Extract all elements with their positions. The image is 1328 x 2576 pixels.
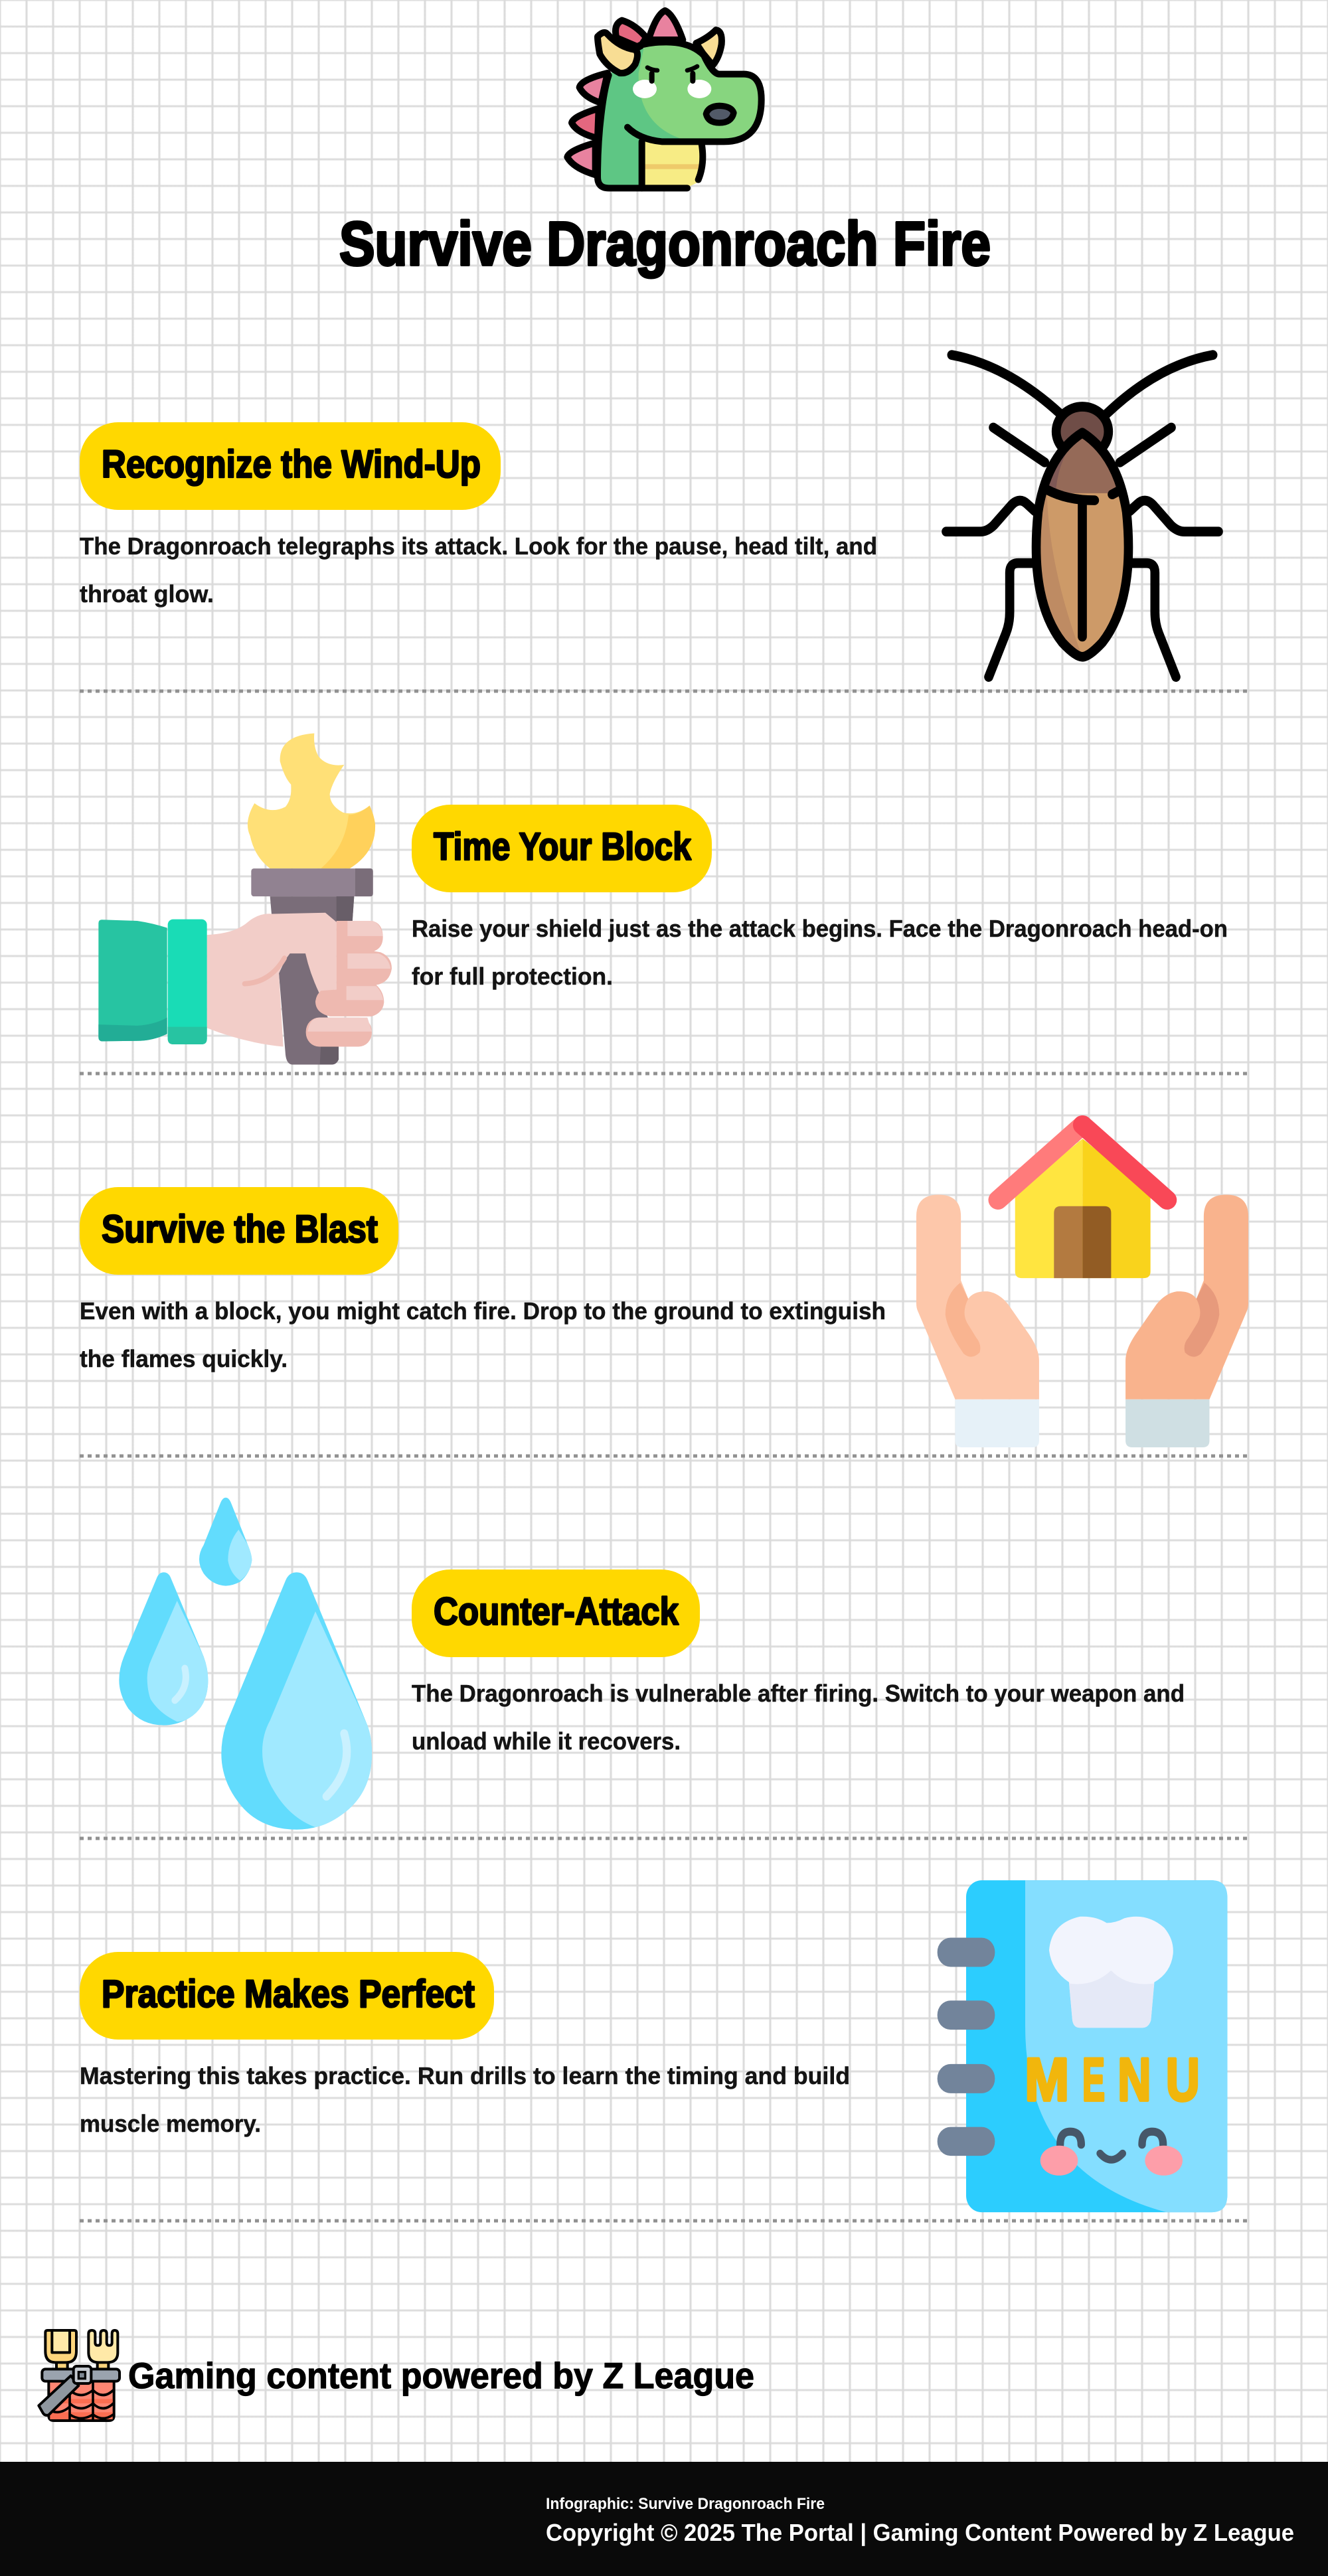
- body text: Mastering this takes practice. Run drills to learn the timing and build: [80, 2062, 850, 2089]
- icon: hands protecting house: [916, 1125, 1248, 1447]
- divider: [80, 1836, 1248, 1840]
- heading pill: [80, 1952, 494, 2040]
- divider: [80, 1072, 1248, 1076]
- body text: for full protection.: [412, 963, 613, 990]
- panel: practice makes perfect: [80, 1880, 1227, 2212]
- body text: [412, 1680, 1185, 1755]
- body text: [412, 915, 1228, 990]
- icon: cockroach: [946, 355, 1218, 677]
- icon: dragon head logo: [567, 11, 762, 188]
- body text: muscle memory.: [80, 2110, 261, 2137]
- body text: The Dragonroach telegraphs its attack. Look for the pause, head tilt, and: [80, 532, 877, 560]
- body text: throat glow.: [80, 580, 214, 607]
- icon: menu book: U: [1166, 2046, 1200, 2113]
- divider: [80, 689, 1248, 693]
- panel: time your block: [98, 734, 1228, 1065]
- icon: water drops: [119, 1498, 372, 1830]
- icon: picnic basket with utensils: [39, 2330, 120, 2421]
- body text: [80, 1297, 886, 1372]
- heading pill: [412, 1570, 700, 1657]
- sponsor text: Gaming content powered by Z League: [128, 2355, 754, 2396]
- icon: menu book: M: [1025, 2046, 1069, 2113]
- body text: The Dragonroach is vulnerable after firing. Switch to your weapon and: [412, 1680, 1185, 1707]
- heading pill: [412, 805, 712, 892]
- panel: survive the blast: [80, 1125, 1248, 1447]
- body text: unload while it recovers.: [412, 1728, 681, 1755]
- icon: menu book: [938, 1880, 1227, 2212]
- panel: counter-attack: [119, 1498, 1185, 1830]
- panel: recognize the wind-up: [80, 355, 1218, 677]
- heading pill: [80, 1187, 398, 1275]
- footer caption: Infographic: Survive Dragonroach Fire: [546, 2495, 825, 2513]
- heading pill: Recognize the Wind-Up: [102, 443, 481, 486]
- heading pill: Time Your Block: [434, 825, 692, 868]
- icon: menu book: N: [1118, 2046, 1151, 2113]
- heading pill: Counter-Attack: [434, 1590, 679, 1633]
- footer copyright: Copyright © 2025 The Portal | Gaming Content Powered by Z League: [546, 2519, 1294, 2547]
- title: Survive Dragonroach Fire: [339, 209, 991, 278]
- sponsor row: [39, 2330, 754, 2421]
- body text: [80, 532, 877, 607]
- divider: [80, 2219, 1248, 2223]
- icon: menu book: E: [1082, 2046, 1105, 2113]
- body text: [80, 2062, 850, 2137]
- body text: Even with a block, you might catch fire. Drop to the ground to extinguish: [80, 1297, 886, 1325]
- divider: [80, 1454, 1248, 1458]
- body text: the flames quickly.: [80, 1345, 288, 1372]
- body text: Raise your shield just as the attack begins. Face the Dragonroach head-on: [412, 915, 1228, 942]
- footer band: [0, 2462, 1328, 2576]
- heading pill: Practice Makes Perfect: [102, 1972, 475, 2016]
- heading pill: [80, 422, 501, 510]
- icon: hand holding torch: [98, 734, 392, 1065]
- heading pill: Survive the Blast: [102, 1208, 378, 1251]
